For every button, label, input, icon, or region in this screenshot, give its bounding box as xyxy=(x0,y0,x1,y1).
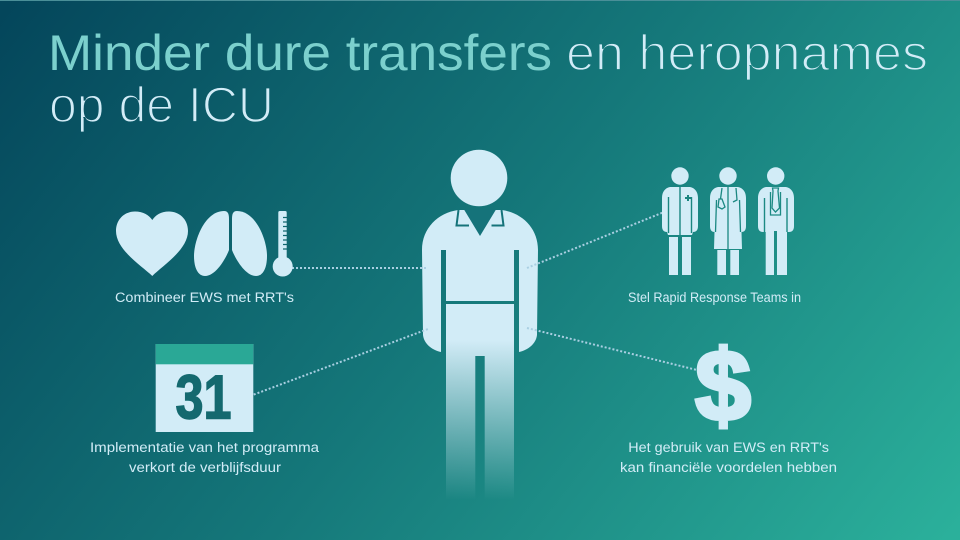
icon: man with tie xyxy=(758,167,794,275)
icon: care team xyxy=(662,167,794,275)
person upper body xyxy=(422,210,538,352)
label: calendar xyxy=(90,440,320,475)
label: dollar xyxy=(620,440,837,475)
person legs xyxy=(446,304,514,500)
icon: doctor xyxy=(710,167,746,275)
label: dollar: Het gebruik van EWS en RRT's xyxy=(628,440,829,455)
label: teams: Stel Rapid Response Teams in xyxy=(628,290,801,305)
icon: calendar: 31 xyxy=(176,364,232,432)
connector: calendar to person xyxy=(250,329,428,396)
connector: dollar to person xyxy=(527,328,705,372)
label: calendar: Implementatie van het programma xyxy=(90,440,320,455)
title: Minder dure transfers xyxy=(48,25,552,81)
label: dollar: kan financiële voordelen hebben xyxy=(620,460,837,475)
icon: calendar xyxy=(156,344,253,432)
icon: dollar: $ xyxy=(695,330,751,442)
icon: nurse xyxy=(662,167,698,275)
icon: heart xyxy=(116,212,188,276)
label: calendar: verkort de verblijfsduur xyxy=(129,460,282,475)
icon: lungs xyxy=(194,211,267,276)
title: en heropnames xyxy=(566,25,928,81)
icon: thermometer xyxy=(273,211,293,276)
title: op de ICU xyxy=(49,77,274,133)
connector: vitals to person xyxy=(284,267,428,269)
label: vitals: Combineer EWS met RRT's xyxy=(115,290,294,305)
person head xyxy=(451,150,507,206)
connector: teams to person xyxy=(527,212,664,268)
central person figure xyxy=(422,150,538,500)
person collar xyxy=(456,210,504,236)
title xyxy=(48,25,928,133)
